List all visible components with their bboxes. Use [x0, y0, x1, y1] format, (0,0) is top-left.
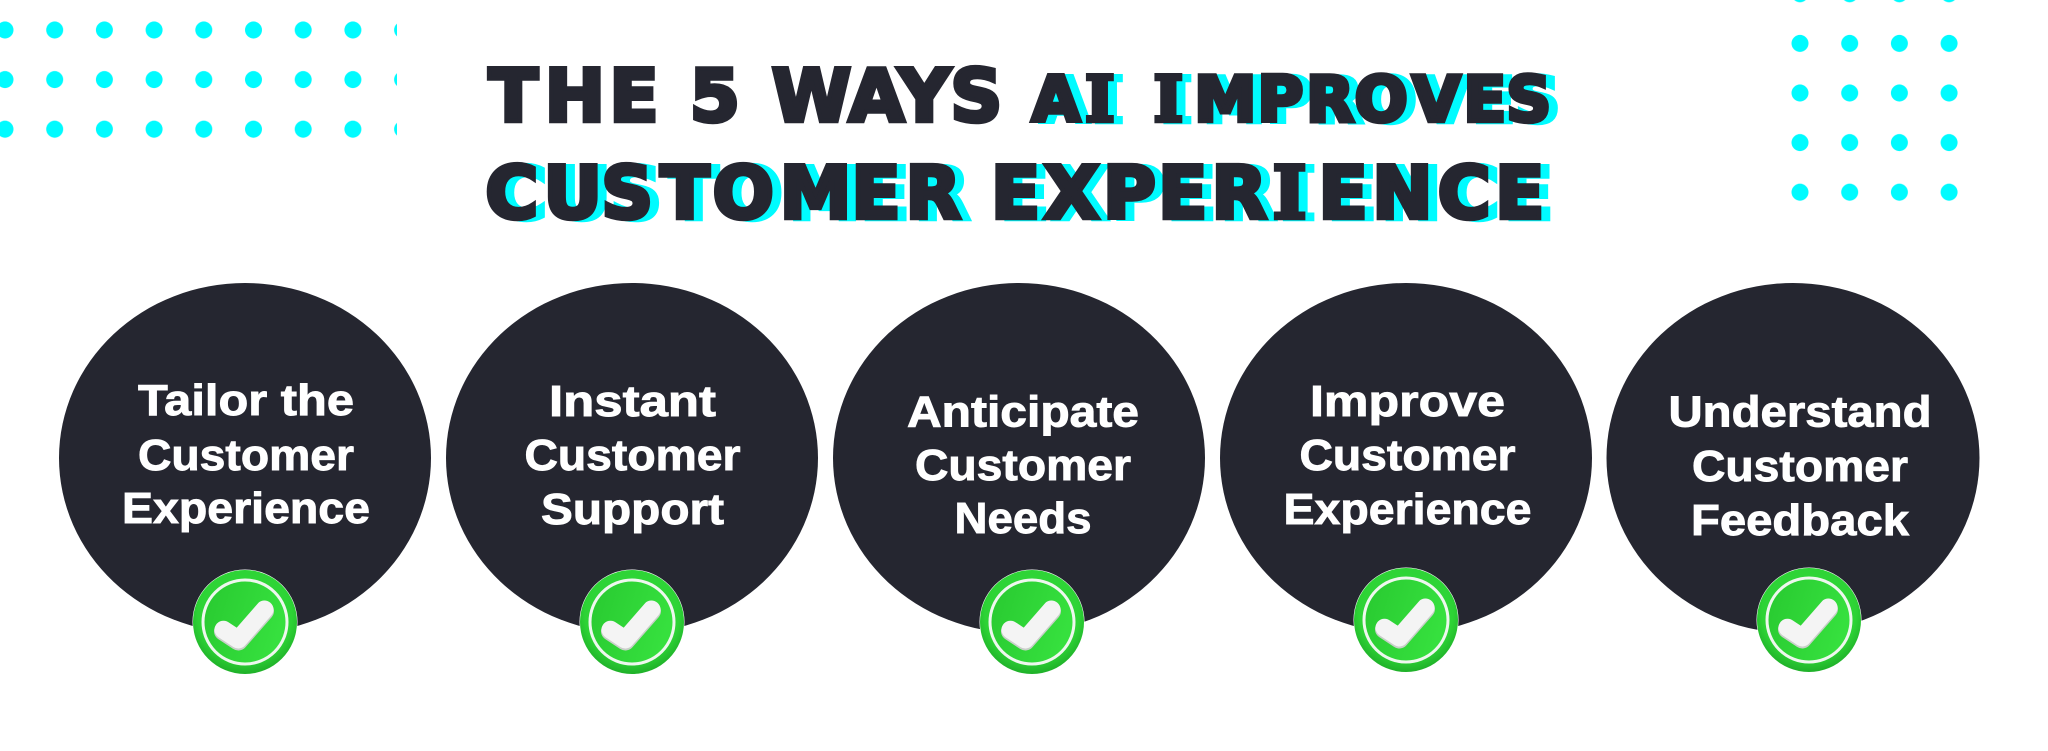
- title line 2: CUSTOMER EXPERIENCE with cyan shadow: CUSTOMER: [485, 151, 961, 235]
- decorative dots: top left: [0, 20, 397, 140]
- label: Experience: [1284, 485, 1532, 534]
- title line 1: THE 5 WAYS: THE5WAYS: [489, 54, 1002, 138]
- panel: Anticipate Customer Needs: [833, 283, 1205, 674]
- title line 1: AI IMPROVES with cyan shadow: [1032, 62, 1551, 136]
- icon: green check badge: [980, 570, 1084, 674]
- title line 1: AI IMPROVES with cyan shadow: I: [1085, 62, 1114, 136]
- title line 2: CUSTOMER EXPERIENCE with cyan shadow: EXPER: [991, 151, 1267, 235]
- label: Customer: [1300, 431, 1516, 480]
- title line 2: CUSTOMER EXPERIENCE with cyan shadow: ENCE: [1318, 151, 1544, 235]
- label: [1284, 377, 1532, 534]
- label: Instant: [549, 377, 716, 426]
- icon: green check badge: [192, 570, 298, 674]
- panel: Tailor the Customer Experience: [59, 283, 431, 674]
- label: Support: [541, 485, 724, 534]
- label: Needs: [954, 494, 1092, 543]
- panel: Understand Customer Feedback: [1606, 283, 1980, 672]
- title line 1: AI IMPROVES with cyan shadow: A: [1032, 63, 1080, 136]
- title: [485, 54, 1551, 235]
- label: Understand: [1668, 388, 1932, 437]
- label: [122, 376, 370, 533]
- panel: Instant Customer Support: [446, 283, 818, 674]
- title line 1: AI IMPROVES with cyan shadow: MPROVES: [1194, 63, 1551, 136]
- label: Customer: [138, 431, 354, 480]
- label: Feedback: [1691, 496, 1910, 545]
- decorative dots: top right: [1790, 0, 1960, 203]
- label: Customer: [1692, 442, 1908, 491]
- title line 2: CUSTOMER EXPERIENCE with cyan shadow: [485, 150, 1544, 235]
- label: Anticipate: [907, 388, 1139, 437]
- panel: Improve Customer Experience: [1220, 283, 1592, 672]
- title line 2: CUSTOMER EXPERIENCE with cyan shadow: I: [1273, 150, 1306, 235]
- label: Improve: [1310, 377, 1505, 426]
- icon: green check badge: [1354, 568, 1458, 672]
- label: [907, 388, 1139, 543]
- icon: green check badge: [580, 570, 684, 674]
- title line 1: AI IMPROVES with cyan shadow: I: [1154, 62, 1183, 136]
- label: Tailor the: [138, 376, 354, 425]
- label: Experience: [122, 484, 370, 533]
- label: Customer: [524, 431, 740, 480]
- icon: green check badge: [1756, 568, 1862, 672]
- label: [1668, 388, 1932, 545]
- label: [524, 377, 740, 534]
- label: Customer: [915, 441, 1131, 490]
